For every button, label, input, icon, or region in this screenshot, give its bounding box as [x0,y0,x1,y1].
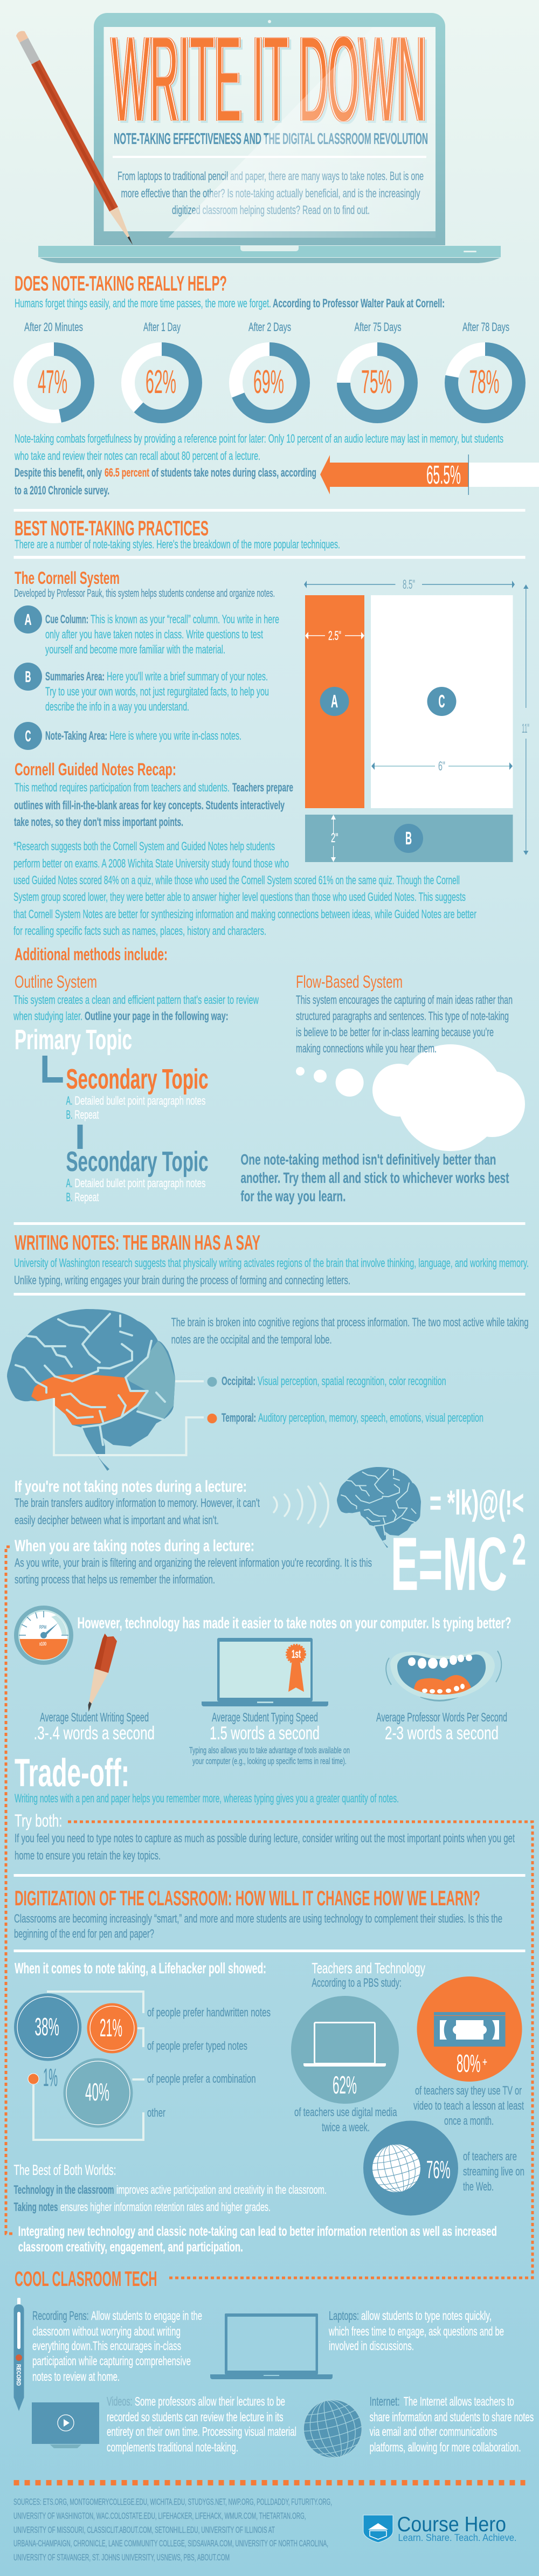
icon: shield [363,2515,393,2543]
paragraph: survey stat: of students take notes during class, according [151,466,316,479]
panel: student typing speed: Average Student Typing Speed [212,1710,318,1724]
screen [103,27,436,231]
connector L [42,1056,63,1083]
legend: temporal [207,1411,483,1424]
panel: internet: Internet: [370,2394,400,2408]
recap text: take notes, so they don't miss important points. [14,815,183,829]
secondary topic 1: Secondary Topic [66,1064,208,1095]
secondary topic 1 [66,1064,208,1121]
paragraph: survey stat [15,466,316,497]
item A: cue column: yourself and become more familiar with the material. [45,643,225,656]
brain base [7,1309,175,1471]
stat 62%: twice a week. [322,2120,370,2134]
6 inch arrow: 6" [438,759,445,774]
panel: recording pens: notes to review at home. [32,2370,120,2384]
icon: recording pen [14,2298,24,2411]
sources: URBANA-CHAMPAIGN, CHRONICLE, LANE COMMUNITY COLLEGE, SIDSAVARA.COM, UNIVERSITY OF NORTH CAROLINA, [13,2538,328,2549]
occipital lobe [126,1341,175,1420]
stat 76%: the Web. [463,2180,494,2193]
panel: videos: recorded so students can review the lecture in its [107,2410,284,2424]
temporal lobe [31,1374,148,1425]
secondary topic 1: Repeat [74,1108,99,1121]
bubble 38% [14,1993,81,2061]
stat 62%: of teachers use digital media [294,2105,397,2119]
secondary topic 2: Secondary Topic [66,1146,208,1177]
divider [14,1222,525,1225]
poll labels: of people prefer a combination [147,2072,255,2085]
section: writing notes and the brain [7,1231,529,1862]
panel: videos [32,2394,296,2454]
trade-off heading: Trade-off: [15,1752,129,1795]
item B: summaries area: describe the info in a way you understand. [45,700,189,713]
donut: after 78 days 78%: 78% [469,363,499,400]
arrow: 65.5% callout: 65.5% [426,461,461,490]
item A: cue column: Cue Column: [45,612,88,626]
best of both worlds: Technology in the classroom [14,2183,114,2196]
recap text: This method requires participation from teachers and students. [15,781,230,794]
indicator light [464,251,476,252]
divider [14,1293,525,1296]
section: does note-taking really help [14,272,539,497]
research paragraph: perform better on exams. A 2008 Wichita State University study found those who [13,857,289,870]
icon: white globe [367,2139,426,2198]
try both text [15,1831,515,1862]
callout: one method isn't better [240,1151,509,1204]
occipital leader line [175,1380,204,1382]
chart: Lifehacker poll: 1% [43,2063,58,2091]
secondary topic 2: Detailed bullet point paragraph notes [74,1176,205,1190]
chart: brain diagram [7,1309,204,1471]
secondary topic 2 [66,1146,208,1204]
best of both worlds: The Best of Both Worlds: [14,2162,116,2178]
panel: videos: Videos: [107,2394,133,2408]
panel: recording pens: classroom without worrying about writing [32,2324,181,2338]
item B: summaries area: B [25,669,31,686]
bubble 21%: 21% [100,2014,122,2042]
item A: cue column: only after you have taken notes in class. Write questions to test [45,628,263,641]
paragraph: survey stat: Despite this benefit, only [15,466,102,479]
intro paragraph: digitized classroom helping students? Read on to find out. [172,203,370,217]
legend: occipital [207,1374,446,1388]
not taking notes block [15,1478,260,1527]
Course Hero logo: Learn. Share. Teach. Achieve. [398,2532,516,2543]
not taking notes block: If you're not taking notes during a lecture: [15,1478,247,1496]
recap text [14,781,293,829]
divider [14,556,525,559]
donut: after 1 day 62%: After 1 Day [143,320,181,334]
taking notes block: When you are taking notes during a lecture: [15,1537,254,1555]
icon: pencil stub [88,1634,117,1712]
stat 80%+ [413,1976,524,2127]
heading: BEST NOTE-TAKING PRACTICES [15,517,209,540]
donut: after 2 days 69%: 69% [253,363,284,400]
screen glare [168,27,436,238]
panel: videos: Some professors allow their lectures to be [135,2394,285,2408]
stat 80%+: + [482,2055,487,2069]
sources: UNIVERSITY OF MISSOURI, CLASSICLIT.ABOUT.COM, SETONHILL.EDU, UNIVERSITY OF ILLINOIS AT [13,2525,275,2535]
not taking notes block: easily decipher between what is important and what isn't. [15,1513,219,1527]
arrow: 65.5% callout [320,454,539,495]
donut: after 75 days 75% [344,320,411,416]
intro paragraph [118,169,424,217]
poll labels [147,2006,271,2119]
icon: recording pen: RECORD [15,2364,22,2386]
icon: thought cloud [296,1044,525,1151]
connector bar [78,1125,83,1149]
2.5 inch arrow: 2.5" [328,629,341,643]
brain folds [16,1314,165,1445]
secondary topic 1: B. [66,1108,72,1121]
heading: WRITING NOTES: THE BRAIN HAS A SAY [15,1231,260,1255]
icon: small brain [337,1467,421,1548]
icon: video screen [32,2402,99,2448]
panel: laptops: Laptops: [329,2309,359,2323]
donut: after 20 minutes 47% [20,320,87,416]
section: digitization of the classroom [14,1887,525,2255]
laptop bezel [94,13,445,245]
item C: note-taking area [14,722,241,750]
icon: laptop with ribbon: 1st [292,1648,301,1661]
panel: student writing speed [33,1634,155,1744]
panel heading: Teachers and Technology [312,1960,425,1976]
stat 80%+: 80% [457,2049,481,2077]
panel: videos: entirety on their own time. Processing visual material [107,2425,296,2439]
laptop hero with title [38,12,501,263]
badge A: A [331,691,338,711]
item B: summaries area: Try to use your own words, not just regurgitated facts, to help you [45,685,269,698]
donut: after 2 days 69% [236,320,303,416]
icon: large pencil [15,30,137,247]
not taking notes block: The brain transfers auditory information to memory. However, it can't [15,1496,260,1510]
recap text: Teachers prepare [232,781,293,794]
research paragraph: *Research suggests both the Cornell System and Guided Notes help students [13,839,275,853]
donut: after 78 days 78% [452,320,519,416]
panel: outline system: This system creates a clean and efficient pattern that's easier to review [13,993,259,1007]
row B [305,815,513,862]
callout: one method isn't better: for the way you learn. [240,1188,345,1204]
panel: student typing speed: 1.5 words a second [210,1723,320,1744]
donut: after 75 days 75%: After 75 Days [355,320,401,334]
sources [13,2497,332,2563]
donut: after 75 days 75%: 75% [361,363,392,400]
primary topic: Primary Topic [15,1024,132,1056]
panel: recording pens: participation while capturing comprehensive [32,2354,191,2368]
secondary topic 1: A. [66,1094,72,1107]
section: cool classroom tech [14,2268,534,2464]
donut: after 1 day 62%: 62% [146,363,176,400]
heading: COOL CLASROOM TECH [15,2268,157,2291]
6 inch arrow [371,759,513,774]
badge B [394,824,423,853]
panel: outline system: when studying later. [13,1009,82,1023]
recap text: outlines with fill-in-the-blank areas for key concepts. Students interactively [14,798,285,812]
legend: temporal: Temporal: [222,1411,256,1424]
2 inch arrow [331,815,338,862]
panel: recording pens [14,2298,202,2411]
poll labels: other [147,2106,165,2119]
panel: student typing speed: your computer (e.g., looking up specific terms in real time). [192,1756,347,1766]
column A [305,595,364,808]
item C: note-taking area: C [25,728,31,745]
research paragraph [13,839,476,938]
panel: outline system: Outline your page in the following way: [85,1009,229,1023]
paragraph: survey stat: to a 2010 Chronicle survey. [15,484,109,497]
badge B: B [405,828,412,848]
item B: summaries area [14,663,269,713]
panel subheading: According to a PBS study: [312,1976,402,1989]
panel: videos: complements traditional note-taking. [107,2440,238,2454]
sources: UNIVERSITY OF STAVANGER, ST. JOHNS UNIVERSITY, USNEWS, PBS, ABOUT.COM [13,2552,230,2563]
item C: note-taking area: Note-Taking Area: [45,729,107,742]
panel: flow-based system: making connections while you hear them. [296,1042,437,1055]
best of both worlds: improves active participation and creativity in the classroom. [116,2183,327,2196]
item C: note-taking area: Here is where you write in-class notes. [109,729,241,742]
donut: after 20 minutes 47%: After 20 Minutes [24,320,83,334]
panel: teachers and technology [291,1960,524,2216]
bubble 40%: 40% [85,2078,109,2106]
intro line: Humans forget things easily, and the more time passes, the more we forget. [15,297,271,310]
panel: student typing speed [189,1638,350,1766]
item A: cue column [14,605,279,656]
8.5 inch arrow: 8.5" [403,577,415,592]
panel: laptops [210,2309,504,2379]
best of both worlds: ensures higher information retention rates and higher grades. [60,2200,271,2214]
stat 76% [363,2121,524,2216]
bubble 1% [28,2063,58,2091]
donut: after 1 day 62% [128,320,195,416]
divider [14,1950,525,1952]
heading: DOES NOTE-TAKING REALLY HELP? [15,272,227,295]
dotted orange route [6,1547,533,2278]
sources: UNIVERSITY OF WASHINGTON, WAC.COLOSTATE.EDU, LIFEHACKER, LIFEHACK, WMUR.COM, THETARTAN.ORG, [13,2511,306,2521]
panel: internet [298,2394,534,2464]
legend: occipital: Visual perception, spatial recognition, color recognition [258,1374,446,1388]
section: best note-taking practices [13,517,529,1204]
trackpad notch [240,246,299,251]
poll labels: of people prefer typed notes [147,2039,247,2052]
11 inch arrow [522,584,529,855]
column C [371,595,513,808]
icon: speedometer: x100 [39,1641,46,1647]
formula E=MC2: 2 [512,1525,526,1574]
conclusion [18,2224,497,2255]
best of both worlds: Taking notes [14,2200,58,2214]
panel: outline system: Outline System [15,972,97,991]
bubble 38%: 38% [34,2013,59,2041]
stat 62%: 62% [333,2071,357,2099]
panel: recording pens: Recording Pens: [32,2309,88,2323]
intro text [14,1912,502,1940]
research paragraph: for recalling specific facts such as names, places, history and characters. [13,924,266,938]
poll heading: When it comes to note taking, a Lifehacker poll showed: [15,1960,266,1976]
intro text: Unlike typing, writing engages your brain during the process of forming and connecting letters. [14,1273,350,1287]
taking notes block [15,1537,372,1586]
item B: summaries area: Here you'll write a brief summary of your notes. [107,670,268,683]
Course Hero logo [363,2513,516,2543]
badge C [427,687,456,716]
Cornell heading: The Cornell System [15,568,120,588]
divider [14,509,525,512]
Cornell intro: Developed by Professor Pauk, this system helps students condense and organize notes. [14,588,275,600]
panel: flow-based system: Flow-Based System [296,972,403,991]
badge C: C [439,691,445,711]
item B: summaries area: Summaries Area: [45,670,105,683]
chart: Lifehacker poll [14,1960,271,2140]
panel: flow-based system [296,972,513,1055]
paragraph: forgetfulness: who take and review their notes can recall about 80 percent of a lecture. [14,449,260,463]
secondary topic 2: A. [66,1176,72,1190]
secondary topic 2: Repeat [74,1190,99,1204]
brain description [171,1315,529,1346]
taking notes block: As you write, your brain is filtering and organizing the relevent information you're recording. It is this [15,1556,372,1569]
badge A [320,687,349,716]
panel: recording pens: Allow students to engage in the [91,2309,202,2323]
donut: after 78 days 78%: After 78 Days [462,320,509,334]
panel: recording pens: everything down.This encourages in-class [32,2339,181,2353]
divider [14,1874,525,1877]
legend: occipital: Occipital: [222,1374,255,1388]
try both text: home to ensure you retain the key topics. [15,1849,161,1862]
divider bar [113,156,426,158]
panel: student typing speed: Typing also allows you to take advantage of tools available on [189,1745,350,1755]
panel: outline system [13,972,259,1204]
stat 76%: 76% [426,2155,451,2184]
icon: blue globe [298,2394,368,2464]
donut: after 20 minutes 47%: 47% [38,363,67,400]
icon: speedometer: RPM [39,1624,46,1630]
secondary topic 1: Detailed bullet point paragraph notes [74,1094,205,1107]
paragraph: survey stat: 66.5 percent [105,466,149,479]
8.5 inch arrow [304,577,515,592]
item A: cue column: This is known as your “recall” column. You write in here [91,612,279,626]
item A: cue column: A [25,611,32,629]
poll labels: of people prefer handwritten notes [147,2006,271,2019]
additional methods heading: Additional methods include: [15,945,168,964]
try both heading: Try both: [15,1811,63,1830]
icon: mouth [386,1651,501,1700]
2 inch arrow: 2" [331,831,338,845]
chart: Cornell page layout diagram [304,577,529,862]
Cornell guided notes recap heading: Cornell Guided Notes Recap: [15,760,176,779]
panel: student writing speed: Average Student Writing Speed [40,1710,149,1724]
2.5 inch arrow [305,629,364,643]
brain description: notes are the occipital and the temporal lobe. [171,1333,332,1346]
taking notes block: sorting process that helps us remember the information. [15,1573,215,1586]
intro text [14,1256,529,1287]
bubble 40% [64,2058,133,2127]
temporal leader line [54,1398,204,1455]
stat 62% [291,1996,399,2134]
Course Hero logo: Course Hero [397,2513,506,2536]
secondary topic 2: B. [66,1190,72,1204]
laptop keyboard base [38,246,501,257]
icon: laptop with ribbon [202,1638,328,1706]
icon: sound waves [274,1483,328,1527]
stat 80%+: once a month. [444,2114,494,2127]
intro line: According to Professor Walter Pauk at Cornell: [273,297,445,310]
laptop lower lip [39,258,500,263]
panel: laptops: involved in discussions. [329,2339,414,2353]
donut: after 2 days 69%: After 2 Days [248,320,291,334]
icon: speedometer [14,1606,73,1665]
icon: VHS tape [434,2012,506,2047]
dashed footer divider [14,2480,525,2485]
best of both worlds [14,2162,327,2214]
conclusion: classroom creativity, engagement, and participation. [18,2240,243,2255]
connector lines [33,1992,144,2140]
bubble 21% [87,2003,137,2053]
icon: laptop [210,2313,333,2379]
subheading: There are a number of note-taking styles. Here's the breakdown of the more popular techniques. [15,538,340,551]
panel: professor speed [376,1651,507,1744]
paragraph: forgetfulness [14,432,503,463]
panel: student writing speed: .3-.4 words a second [33,1723,155,1744]
camera dot [268,20,271,23]
intro text: beginning of the end for pen and paper? [14,1927,154,1940]
